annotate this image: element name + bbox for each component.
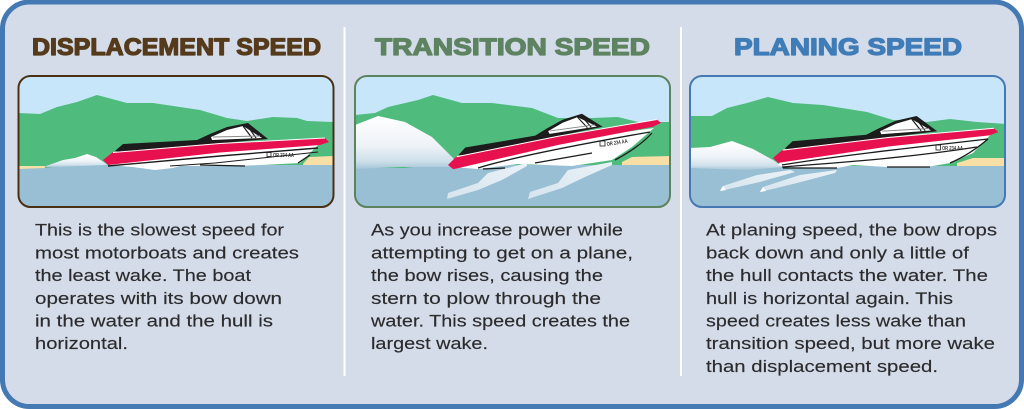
text: planing description: hull is horizontal again. This	[706, 289, 953, 308]
text: transition description: attempting to get on a plane,	[371, 243, 633, 262]
panel: planing speed	[690, 34, 1006, 376]
text: displacement description: horizontal.	[35, 334, 128, 353]
heading: transition speed: TRANSITION SPEED	[375, 34, 650, 61]
panel: transition speed	[355, 34, 671, 353]
text: planing description: speed creates less wake than	[706, 312, 966, 330]
text: planing description: the hull contacts the water. The	[706, 266, 988, 285]
illustration: boat at transition speed	[355, 76, 671, 208]
text: displacement description	[35, 221, 299, 353]
text: transition description: the bow rises, causing the	[371, 266, 603, 285]
text: planing description	[706, 221, 997, 376]
illustration: boat at transition speed: OR 234 AA	[606, 139, 628, 148]
heading: planing speed: PLANING SPEED	[734, 34, 962, 61]
heading: displacement speed: DISPLACEMENT SPEED	[32, 34, 321, 61]
text: transition description: largest wake.	[371, 334, 488, 353]
illustration: boat at planing speed: OR 234 AA	[942, 146, 963, 152]
text: planing description: back down and only a little of	[706, 243, 969, 262]
text: displacement description: in the water and the hull is	[35, 312, 273, 330]
text: displacement description: operates with its bow down	[35, 289, 282, 308]
illustration: boat at displacement speed	[18, 76, 334, 208]
text: displacement description: the least wake. The boat	[35, 266, 251, 285]
text: transition description: water. This speed creates the	[370, 312, 630, 330]
text: planing description: than displacement speed.	[706, 357, 938, 376]
text: planing description: transition speed, but more wake	[706, 334, 995, 353]
text: displacement description: This is the slowest speed for	[35, 221, 284, 240]
illustration: boat at displacement speed: OR 234 AA	[273, 153, 294, 159]
text: planing description: At planing speed, the bow drops	[706, 221, 997, 240]
text: transition description: As you increase power while	[371, 221, 623, 240]
text: transition description: stern to plow through the	[371, 289, 601, 308]
text: transition description	[370, 221, 633, 353]
illustration: boat at planing speed	[690, 76, 1006, 208]
panel: displacement speed	[18, 34, 334, 353]
text: displacement description: most motorboats and creates	[35, 243, 299, 262]
